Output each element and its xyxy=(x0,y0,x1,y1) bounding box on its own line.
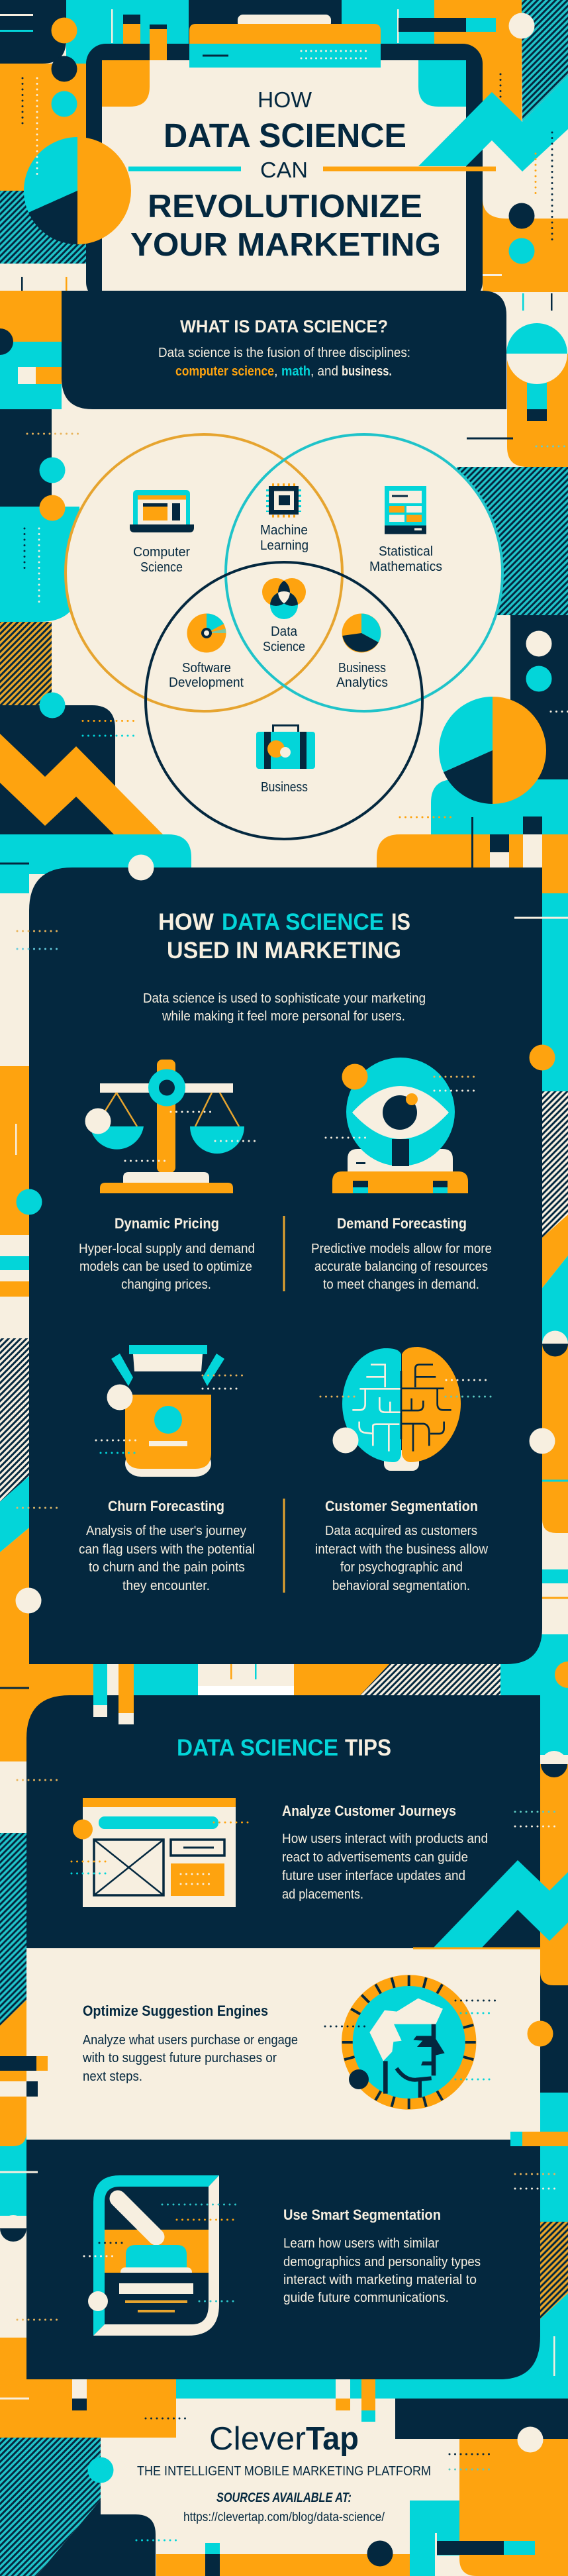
text: marketing intro: while making it feel more personal for users. xyxy=(162,1009,405,1024)
text: definition: math xyxy=(281,364,310,379)
side decoration for tips panel xyxy=(0,1695,568,2399)
tablet frame with title: YOUR MARKETING xyxy=(130,227,441,263)
heading: used in marketing: IS xyxy=(391,909,410,935)
card text: dynamic pricing: Hyper-local supply and demand xyxy=(79,1242,255,1256)
text: definition: computer science xyxy=(175,364,274,379)
heading: data science tips: DATA SCIENCE xyxy=(177,1735,338,1761)
card text: customer segmentation xyxy=(315,1498,489,1593)
sources xyxy=(183,2491,385,2524)
tip text: use smart segmentation: Learn how users with similar xyxy=(283,2236,439,2251)
side decoration for marketing panel xyxy=(0,862,568,1695)
sources: SOURCES AVAILABLE AT: xyxy=(216,2491,352,2505)
venn section side decoration xyxy=(0,409,568,893)
card text: customer segmentation: for psychographic and xyxy=(340,1560,463,1575)
arrow: tips zigzag xyxy=(433,1860,568,1948)
label: statistical mathematics: Statistical xyxy=(379,544,433,559)
tip text: use smart segmentation: demographics and personality types xyxy=(283,2255,481,2269)
label: business analytics xyxy=(336,661,388,690)
text: marketing intro: Data science is used to sophisticate your marketing xyxy=(143,991,426,1006)
label: computer science: Computer xyxy=(133,545,190,560)
icon: software disc xyxy=(187,613,226,653)
label: computer science: Science xyxy=(140,560,183,575)
chart: lower right pie xyxy=(439,697,546,804)
sources: https://clevertap.com/blog/data-science/ xyxy=(183,2510,385,2524)
decorative circles around venn xyxy=(40,457,552,718)
tip text: analyze customer journeys: react to advertisements can guide xyxy=(282,1850,468,1865)
card text: demand forecasting: Predictive models allow for more xyxy=(311,1242,492,1256)
tablet frame with title xyxy=(86,15,483,302)
icon: briefcase xyxy=(256,726,315,769)
panel: how data science is used in marketing xyxy=(29,867,542,1664)
card text: demand forecasting: to meet changes in demand. xyxy=(323,1277,479,1292)
heading: used in marketing: USED IN MARKETING xyxy=(167,938,401,964)
logo: clevertap: Tap xyxy=(306,2421,359,2457)
logo: clevertap xyxy=(209,2421,359,2457)
title accent rules xyxy=(128,167,496,171)
card text: churn forecasting: they encounter. xyxy=(122,1579,210,1593)
text: definition: , and xyxy=(310,364,338,379)
decorative dots and circles in header xyxy=(23,13,552,264)
panel: data science tips xyxy=(26,1695,568,2379)
card text: demand forecasting: Demand Forecasting xyxy=(337,1215,467,1232)
label: machine learning xyxy=(260,523,308,553)
tip text: analyze customer journeys: ad placements. xyxy=(282,1887,363,1902)
card text: churn forecasting: to churn and the pain points xyxy=(89,1560,245,1575)
label: business: Business xyxy=(261,780,308,795)
chart: venn diagram of data science xyxy=(66,434,502,839)
icon: mobile booklet xyxy=(84,2175,236,2336)
icon: eye on pedestal xyxy=(326,1058,475,1193)
card text: demand forecasting: accurate balancing of resources xyxy=(314,1260,488,1274)
tip text: optimize suggestion engines: Analyze what users purchase or engage xyxy=(83,2033,298,2048)
tablet frame with title: REVOLUTIONIZE xyxy=(148,189,422,224)
card text: customer segmentation: Data acquired as customers xyxy=(325,1524,477,1538)
label: data science: Data xyxy=(271,624,298,639)
heading: data science tips: TIPS xyxy=(345,1735,391,1761)
card text: demand forecasting xyxy=(311,1215,492,1292)
tip text: analyze customer journeys: Analyze Customer Journeys xyxy=(282,1803,456,1819)
icon: brain xyxy=(320,1347,493,1471)
label: machine learning: Machine xyxy=(260,523,308,538)
label: business analytics: Business xyxy=(338,661,386,675)
tip text: analyze customer journeys: future user interface updates and xyxy=(282,1869,465,1883)
label: software development xyxy=(169,661,244,690)
icon: business analytics pie xyxy=(342,613,381,653)
tablet frame with title: CAN xyxy=(260,158,308,182)
icon: head in dial xyxy=(325,1975,496,2110)
oval with stem on right of panel xyxy=(506,323,567,421)
card text: dynamic pricing: changing prices. xyxy=(121,1277,211,1292)
heading: used in marketing: DATA SCIENCE xyxy=(222,909,384,935)
tip text: use smart segmentation: Use Smart Segmentation xyxy=(283,2206,441,2223)
footer background shapes xyxy=(0,2379,568,2576)
label: statistical mathematics: Mathematics xyxy=(369,560,442,574)
tablet frame with title: HOW xyxy=(258,87,312,112)
card text: churn forecasting: can flag users with the potential xyxy=(79,1542,255,1557)
card text: churn forecasting xyxy=(79,1498,255,1593)
card text: dynamic pricing: models can be used to optimize xyxy=(79,1260,252,1274)
tagline: THE INTELLIGENT MOBILE MARKETING PLATFORM xyxy=(137,2464,431,2479)
card text: dynamic pricing xyxy=(79,1215,255,1292)
tip text: optimize suggestion engines: Optimize Suggestion Engines xyxy=(83,2003,268,2019)
icon: data science overlap xyxy=(262,578,306,619)
icon: scales xyxy=(85,1060,256,1193)
logo: clevertap: Clever xyxy=(209,2421,306,2457)
card text: churn forecasting: Analysis of the user's journey xyxy=(86,1524,246,1538)
card text: customer segmentation: behavioral segmentation. xyxy=(332,1579,470,1593)
header background shapes xyxy=(0,0,568,467)
label: business analytics: Analytics xyxy=(336,675,388,690)
label: data science: Science xyxy=(263,640,305,654)
divider xyxy=(283,1499,285,1593)
card text: dynamic pricing: Dynamic Pricing xyxy=(115,1215,219,1232)
card text: customer segmentation: interact with the business allow xyxy=(315,1542,489,1557)
rule xyxy=(413,1947,540,1950)
divider xyxy=(283,1216,285,1291)
text: definition xyxy=(158,346,410,379)
label: software development: Development xyxy=(169,675,244,690)
tip text: use smart segmentation xyxy=(283,2206,481,2305)
tip text: use smart segmentation: guide future communications. xyxy=(283,2291,449,2305)
label: software development: Software xyxy=(182,661,231,675)
tip text: optimize suggestion engines xyxy=(82,2003,298,2084)
text: definition: , xyxy=(274,364,278,379)
icon: laptop xyxy=(130,490,194,532)
card text: churn forecasting: Churn Forecasting xyxy=(108,1498,224,1514)
accents over tips panel edges xyxy=(0,1661,568,2376)
panel: what is data science xyxy=(62,291,506,409)
text: definition: business. xyxy=(342,364,392,379)
tip text: use smart segmentation: interact with marketing material to xyxy=(283,2273,477,2287)
tip text: analyze customer journeys xyxy=(282,1803,488,1902)
label: machine learning: Learning xyxy=(260,538,308,553)
heading: used in marketing xyxy=(158,909,410,964)
band between panels xyxy=(0,1664,500,1761)
tip text: optimize suggestion engines: with to suggest future purchases or xyxy=(82,2051,277,2065)
text: marketing intro xyxy=(143,991,426,1024)
label: data science xyxy=(263,624,305,654)
tip text: optimize suggestion engines: next steps. xyxy=(83,2069,142,2084)
heading: what is data science: WHAT IS DATA SCIENCE? xyxy=(180,317,388,336)
tip text: analyze customer journeys: How users interact with products and xyxy=(282,1832,488,1846)
icon: jar xyxy=(96,1345,244,1477)
arrow: cyan zigzag trend line xyxy=(418,76,568,172)
icon: chip xyxy=(267,485,300,517)
card text: customer segmentation: Customer Segmentation xyxy=(325,1498,478,1514)
accents over marketing panel edges xyxy=(16,854,568,1613)
label: statistical mathematics xyxy=(369,544,442,574)
chart: header pie xyxy=(24,137,131,244)
label: computer science xyxy=(133,545,190,575)
heading: used in marketing: HOW xyxy=(158,909,214,935)
text: definition: Data science is the fusion of three disciplines: xyxy=(158,346,410,360)
icon: calculator xyxy=(385,486,426,534)
icon: wireframe browser xyxy=(71,1798,252,1907)
tablet frame with title: DATA SCIENCE xyxy=(164,117,406,154)
